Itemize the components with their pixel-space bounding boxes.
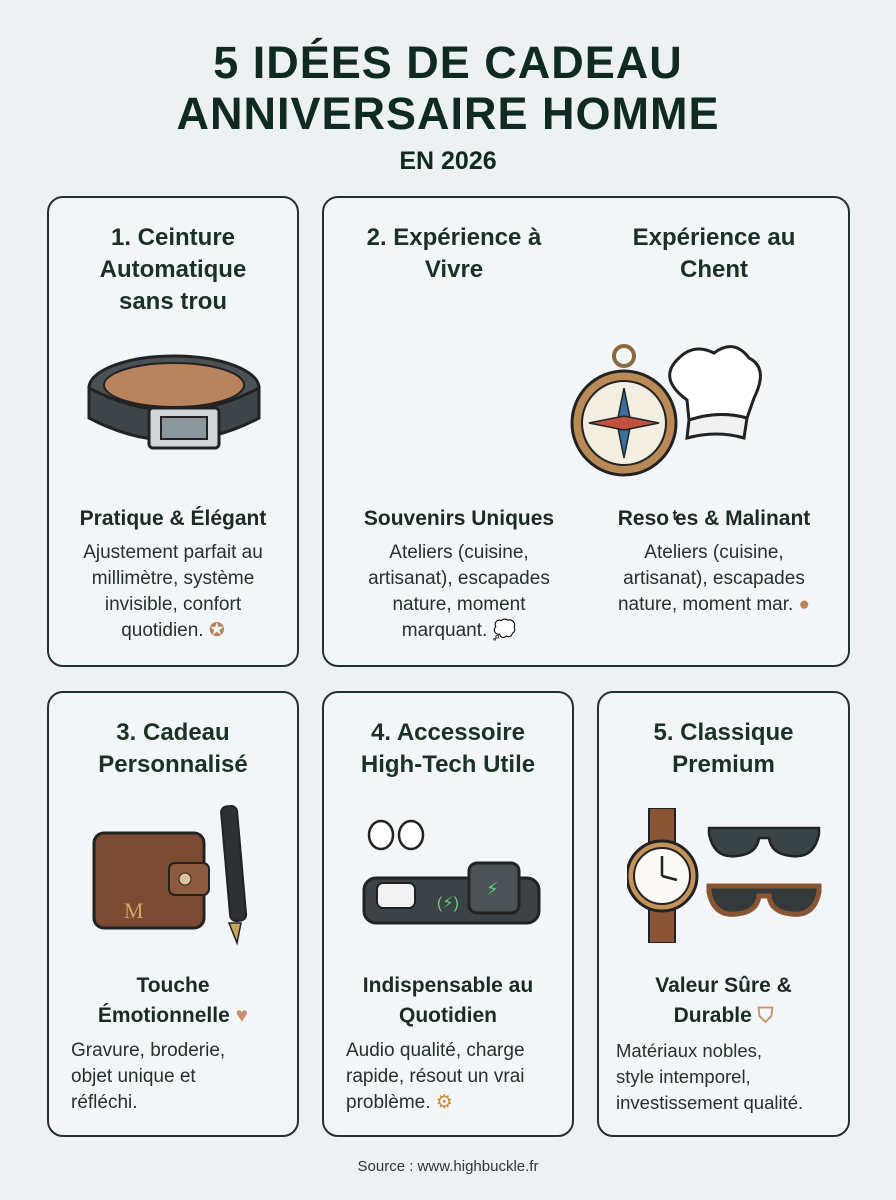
icon: earbuds and charger: ⚡: [486, 879, 499, 899]
text 3: [71, 1040, 225, 1113]
heading 1: [100, 224, 246, 315]
text 4: Audio qualité, charge: [346, 1040, 525, 1061]
heading 3: 3. Cadeau: [116, 719, 230, 746]
heading 2b: Expérience au: [633, 224, 795, 251]
heading 2b: Chent: [680, 256, 748, 283]
text 2b: nature, moment mar. ●: [618, 594, 810, 615]
subheading 1: Pratique & Élégant: [80, 507, 266, 530]
text 2b: Ateliers (cuisine,: [644, 542, 784, 563]
panel: card 4: [322, 691, 574, 1137]
text 5: [616, 1040, 803, 1113]
text 1: Ajustement parfait au: [83, 542, 263, 563]
heading 1: sans trou: [119, 288, 227, 315]
heading 2: [367, 224, 542, 283]
text 1: millimètre, système: [92, 568, 254, 589]
icon: earbuds and charger: (⚡): [437, 895, 459, 912]
subheading 5: Durable ⛉: [674, 1004, 773, 1027]
panel: card 2: [322, 196, 850, 667]
heading 2b: [633, 224, 795, 283]
panel: card 5: [597, 691, 850, 1137]
text 5: style intemporel,: [616, 1066, 751, 1087]
text 1: [83, 542, 263, 641]
heading 1: Automatique: [100, 256, 246, 283]
panel: card 1: [47, 196, 299, 667]
heading 4: 4. Accessoire: [371, 719, 525, 746]
source footer: Source : www.highbuckle.fr: [358, 1158, 538, 1175]
title: ANNIVERSAIRE HOMME: [176, 88, 720, 139]
subheading 4: [363, 974, 533, 1027]
heading 2: 2. Expérience à: [367, 224, 541, 251]
title: 5 IDÉES DE CADEAU: [213, 37, 683, 88]
text 2b: [618, 542, 810, 615]
text 5: Matériaux nobles,: [616, 1040, 762, 1061]
title: [176, 37, 720, 139]
text 2: artisanat), escapades: [368, 568, 550, 589]
subheading 4: Indispensable au: [363, 974, 533, 997]
subheading 3: Émotionnelle ♥: [98, 1004, 248, 1027]
panel: card 3: [47, 691, 299, 1137]
subtitle: EN 2026: [399, 147, 497, 175]
text 4: problème. ⚙: [346, 1092, 453, 1113]
heading 4: High-Tech Utile: [361, 751, 535, 778]
text 2: Ateliers (cuisine,: [389, 542, 529, 563]
text 1: invisible, confort: [105, 594, 241, 615]
subheading 2: Souvenirs Uniques: [364, 507, 554, 530]
subheading 4: Quotidien: [399, 1004, 497, 1027]
heading 3: Personnalisé: [98, 751, 248, 778]
heading 5: Premium: [672, 751, 775, 778]
heading 5: [653, 719, 794, 778]
text 4: rapide, résout un vrai: [346, 1066, 524, 1087]
heading 5: 5. Classique: [653, 719, 794, 746]
heading 1: 1. Ceinture: [111, 224, 235, 251]
subheading 5: Valeur Sûre &: [655, 974, 792, 997]
text 4: [346, 1040, 525, 1113]
icon: wallet and pen: M: [124, 898, 144, 923]
icon: compass and chef hat: [570, 344, 762, 476]
subheading 2b: Reso ͭes & Malinant: [618, 507, 810, 530]
icon: watch and sunglasses: [627, 808, 822, 943]
text 3: réfléchi.: [71, 1092, 138, 1113]
heading 2: Vivre: [425, 256, 483, 283]
subheading 5: [655, 974, 792, 1027]
text 3: Gravure, broderie,: [71, 1040, 225, 1061]
text 2: [368, 542, 550, 641]
heading 3: [98, 719, 248, 778]
text 1: quotidien. ✪: [121, 620, 225, 641]
text 2: nature, moment: [392, 594, 526, 615]
text 5: investissement qualité.: [616, 1092, 803, 1113]
text 2: marquant. 💭: [402, 620, 516, 641]
icon: earbuds and charger: [362, 820, 540, 924]
subheading 3: Touche: [136, 974, 210, 997]
text 3: objet unique et: [71, 1066, 196, 1087]
subheading 3: [98, 974, 248, 1027]
text 2b: artisanat), escapades: [623, 568, 805, 589]
icon: belt: [88, 354, 260, 450]
heading 4: [361, 719, 535, 778]
icon: wallet and pen: [92, 805, 248, 946]
